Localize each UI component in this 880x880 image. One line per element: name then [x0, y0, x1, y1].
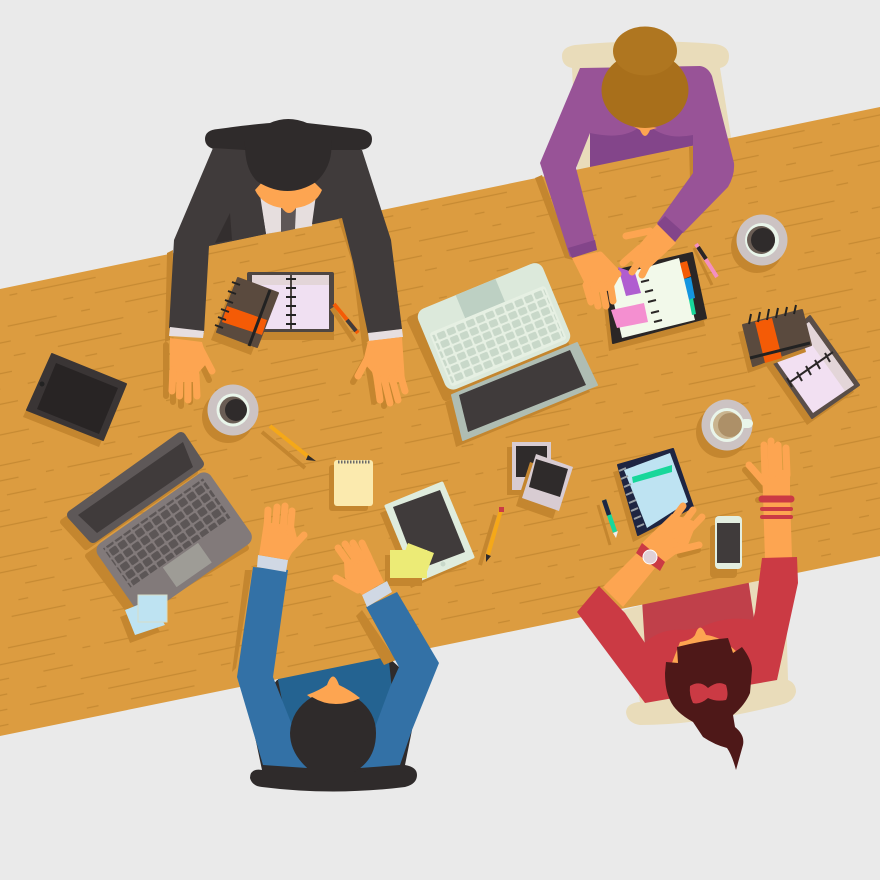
hand shadow right	[353, 345, 392, 406]
open planner right	[762, 316, 859, 425]
person: blue man	[237, 506, 439, 772]
notepad	[329, 460, 373, 511]
hand: right	[749, 441, 790, 496]
sweater and arms	[540, 66, 734, 257]
face	[670, 628, 737, 668]
pen: orange	[332, 304, 358, 341]
coffee cup left	[202, 384, 258, 443]
arm: right	[312, 150, 402, 334]
pen: green	[598, 500, 618, 545]
hand: right	[358, 337, 405, 403]
face	[307, 676, 360, 706]
face	[618, 118, 657, 136]
tablet: dark, left	[23, 354, 126, 447]
purple sticky note	[618, 267, 641, 296]
watch	[636, 543, 665, 571]
notebook: blue spiral	[613, 449, 693, 542]
forearm right	[763, 495, 792, 560]
pencil top left	[262, 426, 316, 468]
torso: blue man	[277, 652, 392, 740]
forearm left	[603, 553, 655, 607]
person: black suit man	[166, 119, 405, 406]
hair	[665, 638, 752, 770]
cuff right	[657, 216, 683, 242]
hand: right	[336, 543, 384, 595]
pink sticky note	[611, 303, 648, 328]
hand: right	[623, 224, 676, 275]
hand: left	[170, 338, 212, 400]
hair	[290, 697, 376, 772]
torso: purple woman	[590, 125, 696, 172]
polaroid photos	[507, 442, 573, 519]
notebook right	[738, 305, 811, 373]
table wood grain	[0, 114, 880, 726]
coffee cup with milk	[696, 400, 753, 458]
hand: left	[642, 506, 702, 562]
laptop: grey	[63, 437, 255, 618]
person: purple woman	[540, 26, 734, 306]
face	[255, 180, 322, 213]
yellow sticky notes	[390, 543, 434, 578]
arm: left	[169, 148, 266, 333]
shirt and tie	[260, 198, 316, 234]
coffee cup top right	[731, 214, 788, 273]
laptop: mint	[411, 260, 597, 447]
cuff right	[362, 581, 392, 607]
hand: left	[572, 252, 621, 306]
smartphone	[710, 516, 742, 578]
hand: left	[259, 506, 304, 560]
planner on black tablet	[601, 253, 706, 351]
hand shadow left	[166, 345, 209, 406]
arm: right	[360, 592, 439, 768]
chair back	[205, 119, 372, 150]
bracelets	[762, 499, 791, 517]
pen: pink	[694, 244, 717, 285]
open planner near man	[247, 272, 334, 340]
person: red woman	[577, 441, 798, 770]
torso: black suit man	[209, 150, 360, 252]
shadows cast by arms	[165, 145, 698, 672]
hair bun	[613, 26, 677, 76]
hair	[245, 140, 331, 191]
hand shadow	[680, 470, 762, 555]
chair: blue man	[250, 657, 417, 792]
table	[0, 107, 880, 736]
chair: red woman	[623, 570, 796, 725]
sticky notes: blue	[120, 595, 167, 643]
cuffs	[169, 327, 403, 341]
tablet: white with yellow notes	[380, 483, 473, 588]
hair bow	[690, 683, 728, 703]
chair: purple woman	[562, 41, 733, 190]
cuff left	[568, 240, 597, 258]
arm: left	[237, 567, 307, 768]
hair	[602, 52, 688, 128]
sweater and arms	[577, 557, 798, 703]
notebook near man	[211, 278, 278, 355]
cuff left	[257, 555, 288, 572]
pencil bottom	[480, 507, 504, 565]
torso: red woman	[642, 578, 755, 648]
